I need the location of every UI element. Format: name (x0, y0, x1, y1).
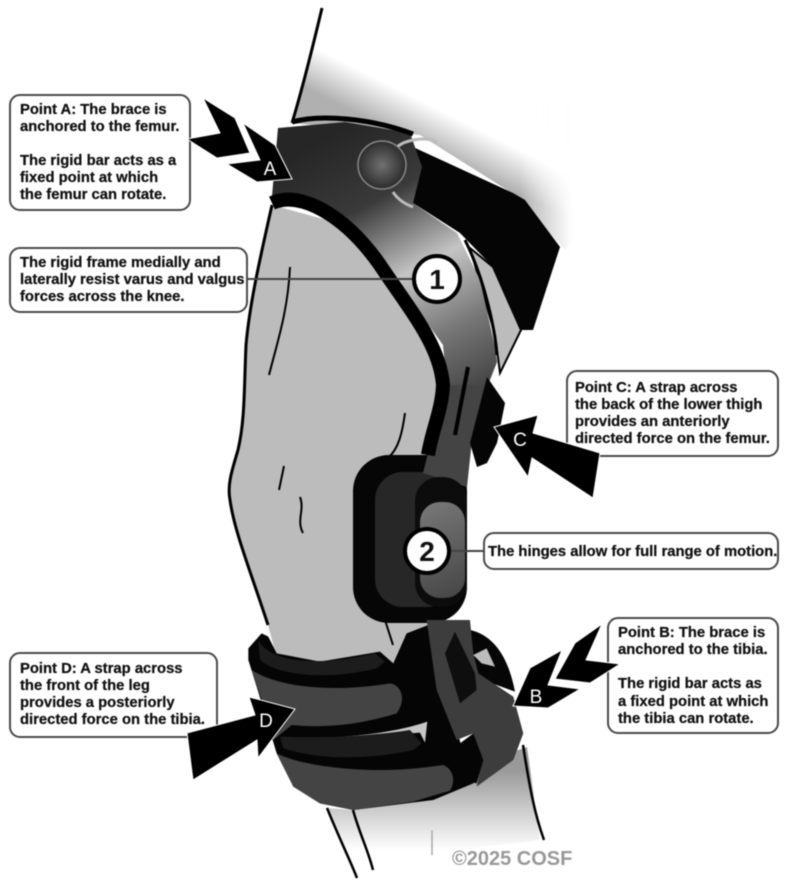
pivot ball (358, 141, 406, 189)
text: Point C: A strap across (575, 380, 738, 396)
ring (470, 630, 515, 692)
marker circle (405, 529, 449, 573)
frame slit (455, 367, 468, 435)
text: provides a posteriorly (20, 695, 175, 711)
marker 2 (405, 529, 449, 573)
lower frame slot (445, 632, 477, 703)
marker number: 2 (419, 536, 435, 567)
text: The rigid bar acts as a (20, 153, 177, 169)
condyle pad inner (375, 472, 455, 607)
chevron inner (513, 650, 580, 708)
frame top edge (292, 118, 413, 134)
text: the back of the lower thigh (575, 397, 762, 413)
marker 1 (414, 256, 460, 302)
chevron outer (555, 624, 620, 683)
ring hole (473, 648, 495, 667)
text: anchored to the femur. (20, 119, 180, 135)
text: a fixed point at which (618, 694, 768, 710)
lower frame (427, 620, 523, 787)
condyle pad (353, 455, 467, 623)
connector 1 (247, 278, 415, 280)
rear thigh sliver (470, 248, 521, 373)
text: directed force on the femur. (575, 431, 770, 447)
text: the femur can rotate. (20, 187, 166, 203)
text: the front of the leg (20, 678, 150, 694)
thigh muscle lines (269, 267, 405, 645)
text: The hinges allow for full range of motion. (488, 544, 777, 560)
callout: Point A (10, 95, 190, 210)
leg outline (229, 205, 272, 625)
chevron outer (187, 98, 250, 158)
chevron inner (227, 123, 292, 182)
thigh right fade (520, 100, 630, 260)
box (10, 248, 247, 312)
hinge plate (420, 502, 465, 598)
upper dark pad (258, 640, 385, 675)
thigh (292, 8, 610, 250)
text: provides an anteriorly (575, 414, 730, 430)
text: The rigid frame medially and (20, 255, 221, 271)
box (567, 371, 778, 456)
strap loop (393, 139, 437, 207)
letter D: D (259, 711, 273, 732)
text: forces across the knee. (20, 289, 184, 305)
lower grey band (277, 753, 453, 810)
frame neck (423, 370, 490, 487)
text: anchored to the tibia. (618, 642, 768, 658)
callout: rigid frame (10, 248, 247, 312)
callout: Point B (608, 618, 778, 733)
gap sliver (313, 722, 427, 743)
frame black band (272, 200, 443, 455)
arrow D (187, 697, 295, 780)
hinge cap (415, 477, 467, 607)
arrow A (187, 98, 292, 182)
callout: Point D (10, 653, 217, 737)
text: Point A: The brace is (20, 102, 167, 118)
inner strap end (460, 733, 483, 783)
thigh outline (292, 8, 322, 123)
rear strap blob (470, 377, 505, 467)
text: directed force on the tibia. (20, 712, 205, 728)
connector 2 (449, 550, 485, 552)
letter B: B (530, 687, 542, 708)
lower leg strip (327, 808, 373, 878)
box (10, 95, 190, 210)
text: Point B: The brace is (618, 625, 765, 641)
copyright: ©2025 COSF (452, 848, 572, 870)
arrow B (513, 624, 620, 708)
illustration: leg with knee brace (229, 8, 630, 878)
box (608, 618, 778, 733)
text: Point D: A strap across (20, 661, 183, 677)
strap base (248, 625, 480, 810)
text: laterally resist varus and valgus (20, 272, 245, 288)
frame rear edge (465, 240, 497, 355)
middle grey band (252, 670, 402, 740)
letter A: A (264, 159, 277, 180)
lower cuff black (248, 620, 523, 810)
letter C: C (513, 430, 527, 451)
text: The rigid bar acts as (618, 676, 762, 692)
text: the tibia can rotate. (618, 711, 754, 727)
lower leg outlines (327, 745, 544, 878)
box (10, 653, 217, 737)
callout: Point C (567, 371, 778, 456)
lower dark pad (280, 730, 422, 757)
black strap upper (413, 147, 560, 330)
marker number: 1 (429, 264, 445, 295)
callout: hinges (484, 533, 778, 569)
lower leg (353, 747, 540, 860)
marker circle (414, 256, 460, 302)
text: fixed point at which (20, 170, 158, 186)
arrow C (494, 415, 600, 498)
arrow shape (494, 415, 600, 498)
leg fill (229, 205, 440, 670)
lower leg crease (431, 830, 433, 855)
arrow shape (187, 697, 295, 780)
box (484, 533, 778, 569)
frame silver upper (272, 122, 497, 385)
